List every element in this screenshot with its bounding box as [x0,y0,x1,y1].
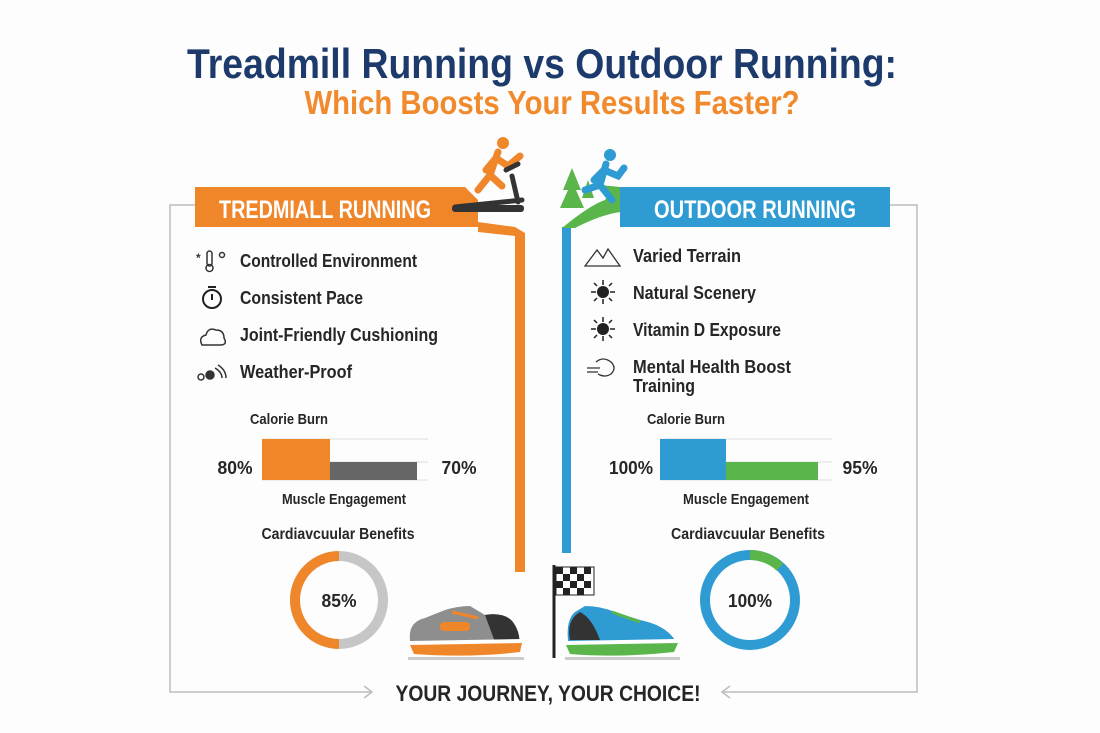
bar chart: outdoor: Muscle Engagement [683,491,809,508]
bar chart: treadmill: 70% [442,458,476,478]
donut chart: treadmill: Cardiavcuular Benefits [262,526,415,543]
icon: stopwatch [203,287,221,308]
list: outdoor features: Natural Scenery [633,283,756,303]
donut chart: outdoor [671,526,825,645]
icon: grey treadmill shoe [408,606,524,660]
bar chart: treadmill: 80% [218,458,252,478]
heading: outdoor: OUTDOOR RUNNING [654,196,856,224]
heading: treadmill: TREDMIALL RUNNING [219,196,431,224]
panel: treadmill frame [170,205,372,698]
icon: sun [591,317,615,341]
title: Treadmill Running vs Outdoor Running: [187,40,897,87]
list: treadmill features: Weather-Proof [240,362,353,382]
list: outdoor features [585,246,791,396]
list: treadmill features [196,251,438,382]
list: treadmill features: Consistent Pace [240,288,363,308]
bar chart: treadmill [218,411,476,508]
icon: treadmill runner [452,137,524,212]
list: treadmill features: Controlled Environment [240,251,417,271]
bar chart: treadmill: Muscle Engagement [282,491,406,508]
bar chart: outdoor: 95% [842,458,878,478]
icon: thermometer [196,251,224,272]
title [187,40,897,121]
list: outdoor features: Training [633,376,695,396]
icon: outdoor runner with trees and path [560,149,624,228]
icon: checkered flag [554,565,594,658]
donut chart: treadmill: 85% [322,591,356,611]
icon: mountains [585,249,620,266]
donut chart: outdoor: 100% [728,591,772,611]
icon: brain [587,359,614,376]
bar chart: outdoor: Calorie Burn [647,411,725,428]
donut chart: outdoor: Cardiavcuular Benefits [671,526,825,543]
bar chart: outdoor [609,411,878,508]
heading: treadmill [195,187,525,572]
list: outdoor features: Mental Health Boost [633,357,791,377]
list: treadmill features: Joint-Friendly Cushioning [240,325,438,345]
icon: cloud [201,329,225,345]
icon: sun [591,280,615,304]
heading: outdoor [562,187,890,553]
icon: thermometer: * [196,251,201,265]
icon: weather [198,365,226,380]
icon: blue outdoor shoe [565,606,680,660]
bar chart: outdoor: 100% [609,458,653,478]
list: outdoor features: Varied Terrain [633,246,741,266]
footer slogan: YOUR JOURNEY, YOUR CHOICE! [396,681,700,706]
list: outdoor features: Vitamin D Exposure [633,320,781,340]
subtitle: Which Boosts Your Results Faster? [304,84,800,121]
panel: outdoor frame [722,205,917,698]
donut chart: treadmill [262,526,415,644]
bar chart: treadmill: Calorie Burn [250,411,328,428]
